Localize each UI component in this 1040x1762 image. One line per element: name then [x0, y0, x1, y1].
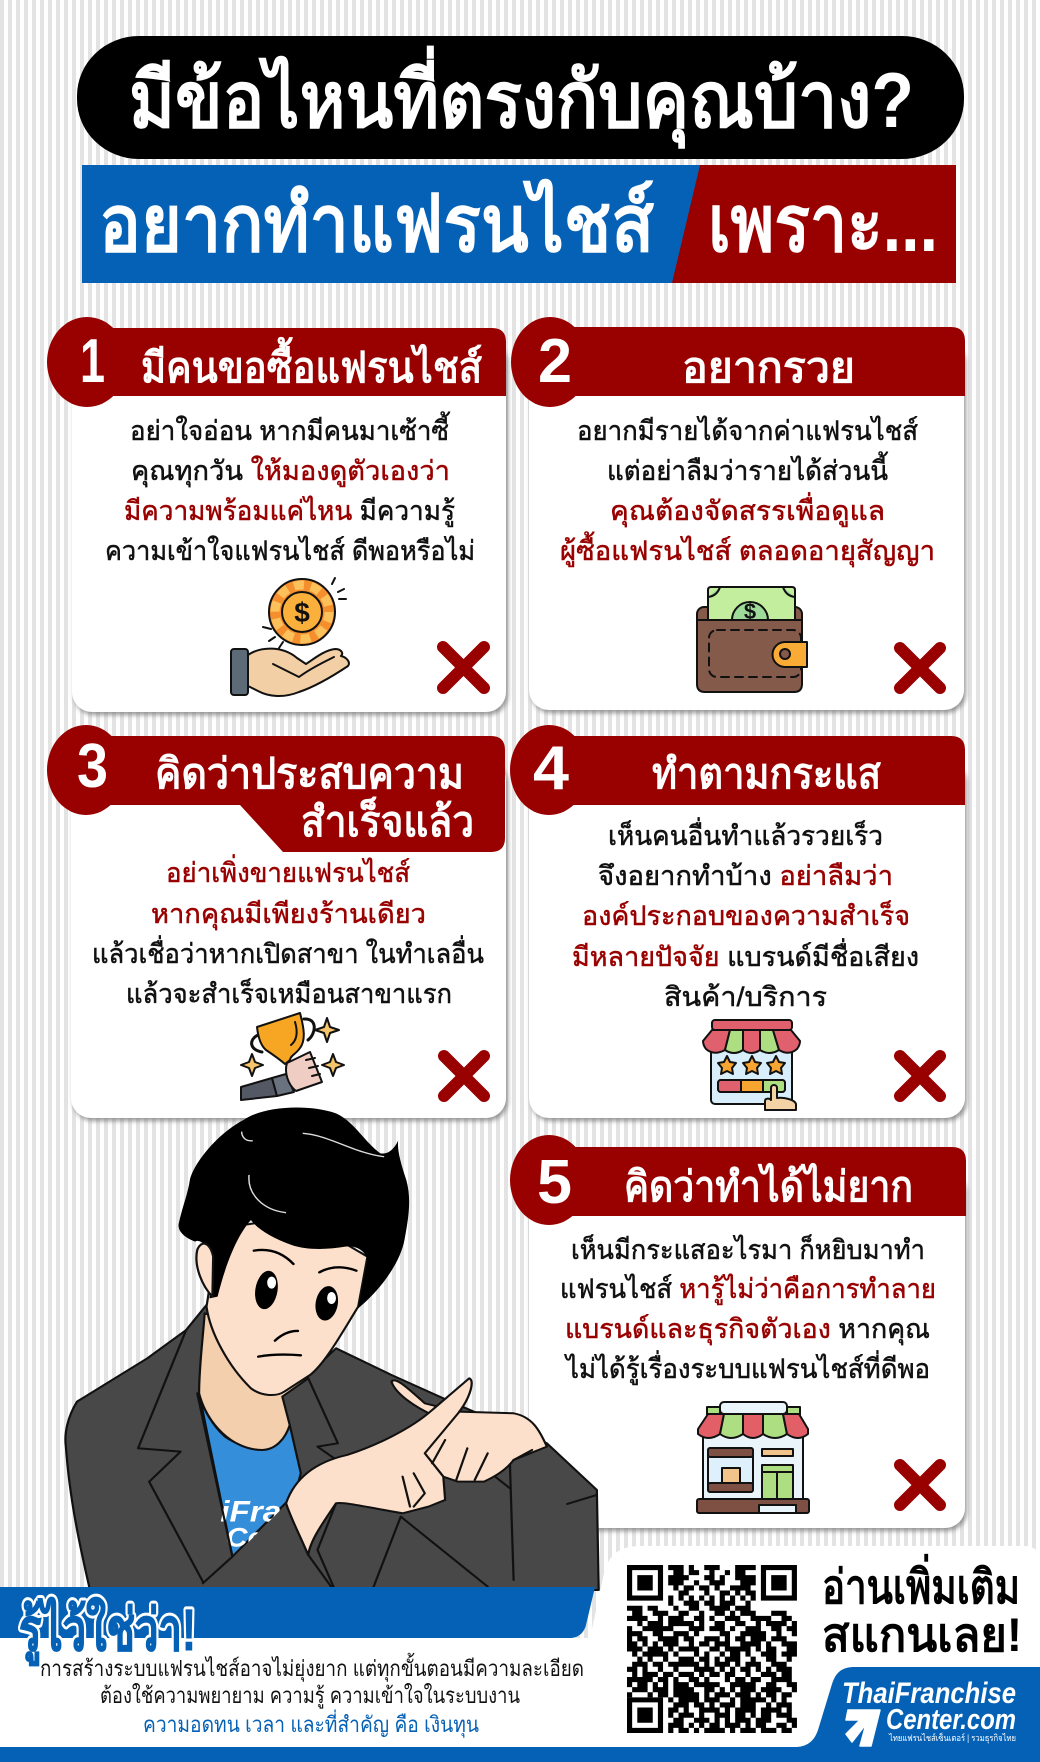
illustration: thinking man pointing	[65, 1108, 599, 1590]
right hand	[392, 1380, 547, 1482]
card 2 text: คุณต้องจัดสรรเพื่อดูแล	[610, 492, 885, 528]
card 1 text: ความเข้าใจแฟรนไชส์ ดีพอหรือไม่	[105, 535, 475, 566]
left hand	[286, 1378, 472, 1555]
card 2 text	[560, 415, 935, 568]
icon: hand with coin	[231, 578, 349, 696]
card 2 header: อยากรวย	[682, 344, 855, 391]
card 4 header: ทำตามกระแส	[652, 750, 881, 797]
title pill: มีข้อไหนที่ตรงกับคุณบ้าง?	[129, 45, 914, 149]
card 5 header	[510, 1135, 966, 1225]
title pill	[77, 36, 964, 159]
card 5 text: แฟรนไชส์ หารู้ไม่ว่าคือการทำลาย	[560, 1273, 936, 1305]
card 2 text: ผู้ซื้อแฟรนไชส์ ตลอดอายุสัญญา	[560, 531, 935, 568]
finger lines	[403, 1440, 532, 1507]
hair	[179, 1108, 409, 1308]
card 4 header: 4	[533, 734, 570, 803]
icon: cross	[444, 1056, 484, 1096]
card 5 text: แบรนด์และธุรกิจตัวเอง หากคุณ	[565, 1313, 930, 1346]
subtitle banner: อยากทำแฟรนไชส์	[99, 178, 655, 268]
note panel: white base	[0, 1546, 1040, 1747]
neck	[199, 1313, 308, 1450]
note text	[40, 1653, 584, 1738]
logo: ไทยแฟรนไชส์เซ็นเตอร์ | รวมธุรกิจไทย	[888, 1731, 1016, 1744]
heading: good to know: รู้ไว้ใช่ว่า!	[19, 1596, 196, 1666]
card 3 header: คิดว่าประสบความ	[155, 750, 464, 797]
card 3 text: อย่าเพิ่งขายแฟรนไชส์	[166, 854, 410, 888]
icon: cross	[900, 1056, 940, 1096]
logo: Center.com	[886, 1704, 1016, 1736]
heading: good to know: รู้ไว้ใช่ว่า!	[19, 1596, 196, 1666]
card 1 text: มีความพร้อมแค่ไหน มีความรู้	[124, 496, 455, 527]
card 5 text: เห็นมีกระแสอะไรมา ก็หยิบมาทำ	[571, 1232, 925, 1265]
card 1 header: 1	[80, 327, 105, 396]
subtitle banner	[82, 165, 956, 283]
card 5 header: 5	[537, 1148, 572, 1217]
call to action	[822, 1553, 1022, 1661]
card 3 text: แล้วเชื่อว่าหากเปิดสาขา ในทำเลอื่น	[92, 935, 484, 969]
note banner	[0, 1587, 595, 1638]
lapels and jacket seams	[138, 1330, 597, 1588]
panel: card 3	[47, 725, 506, 1118]
icon: hand with coin: $	[294, 597, 310, 628]
footer bar	[0, 1747, 1040, 1762]
hair highlights	[242, 1132, 384, 1213]
card 4 text: เห็นคนอื่นทำแล้วรวยเร็ว	[608, 817, 883, 851]
face	[206, 1217, 367, 1395]
card 4 header	[510, 725, 965, 815]
logo: ThaiFranchise	[842, 1677, 1016, 1710]
shirt	[199, 1393, 301, 1557]
note text: การสร้างระบบแฟรนไชส์อาจไม่ยุ่งยาก แต่ทุกขั้นตอนมีความละเอียด	[40, 1653, 584, 1682]
subtitle banner: เพราะ...	[708, 179, 938, 268]
shirt logo: iFran	[220, 1494, 302, 1528]
ear	[196, 1244, 213, 1297]
illustration: thinking man pointing: Cen	[226, 1522, 282, 1552]
card 1 header	[47, 317, 506, 407]
card 3 text: หากคุณมีเพียงร้านเดียว	[151, 899, 426, 931]
card 5 text: ไม่ได้รู้เรื่องระบบแฟรนไชส์ที่ดีพอ	[564, 1350, 930, 1385]
card 4 text: มีหลายปัจจัย แบรนด์มีชื่อเสียง	[572, 938, 919, 972]
icon: wallet: $	[744, 599, 756, 624]
card 4 text: องค์ประกอบของความสำเร็จ	[582, 898, 910, 931]
card 3 header: สำเร็จแล้ว	[301, 796, 474, 845]
icon: storefront	[697, 1402, 809, 1513]
card 1 header: มีคนขอซื้อแฟรนไชส์	[141, 336, 482, 391]
QR code	[627, 1565, 797, 1733]
card 4 text: สินค้า/บริการ	[664, 982, 827, 1012]
panel: card 2	[511, 317, 965, 710]
jacket	[65, 1305, 599, 1590]
icon: cross	[900, 648, 940, 688]
card 3 header: 3	[77, 732, 108, 801]
icon: cross	[443, 647, 484, 688]
call to action: สแกนเลย!	[822, 1608, 1022, 1661]
icon: logo arrow	[846, 1710, 880, 1746]
card 3 text	[92, 854, 484, 1009]
card 2 header: 2	[538, 327, 572, 396]
card 4 text: จึงอยากทำบ้าง อย่าลืมว่า	[598, 861, 893, 891]
card 1 text: อย่าใจอ่อน หากมีคนมาเซ้าซี้	[130, 411, 450, 446]
card 5 text	[560, 1232, 936, 1385]
card 4 text	[572, 817, 919, 1012]
card 2 text: แต่อย่าลืมว่ารายได้ส่วนนี้	[607, 451, 888, 486]
logo	[795, 1667, 1040, 1747]
card 1 text: คุณทุกวัน ให้มองดูตัวเองว่า	[131, 455, 450, 488]
brows nose mouth	[254, 1250, 356, 1357]
card 2 header	[511, 317, 965, 407]
sleeve front	[203, 1493, 336, 1590]
card 1 text	[105, 411, 475, 566]
note text: ความอดทน เวลา และที่สำคัญ คือ เงินทุน	[143, 1709, 479, 1738]
icon: trophy in fist	[241, 1013, 344, 1100]
card 5 header: คิดว่าทำได้ไม่ยาก	[624, 1162, 913, 1210]
icon: wallet	[697, 587, 807, 692]
eyes	[252, 1269, 340, 1322]
card 3 header	[47, 725, 505, 852]
card 3 text: แล้วจะสำเร็จเหมือนสาขาแรก	[126, 976, 452, 1009]
icon: rated shop	[703, 1020, 800, 1110]
icon: cross	[900, 1465, 940, 1505]
panel: card 4	[510, 725, 965, 1118]
note text: ต้องใช้ความพยายาม ความรู้ ความเข้าใจในระบบงาน	[100, 1683, 520, 1709]
card 2 text: อยากมีรายได้จากค่าแฟรนไชส์	[577, 415, 918, 446]
heading: good to know	[19, 1596, 196, 1666]
panel: card 5	[510, 1135, 966, 1528]
panel: card 1	[47, 317, 506, 712]
